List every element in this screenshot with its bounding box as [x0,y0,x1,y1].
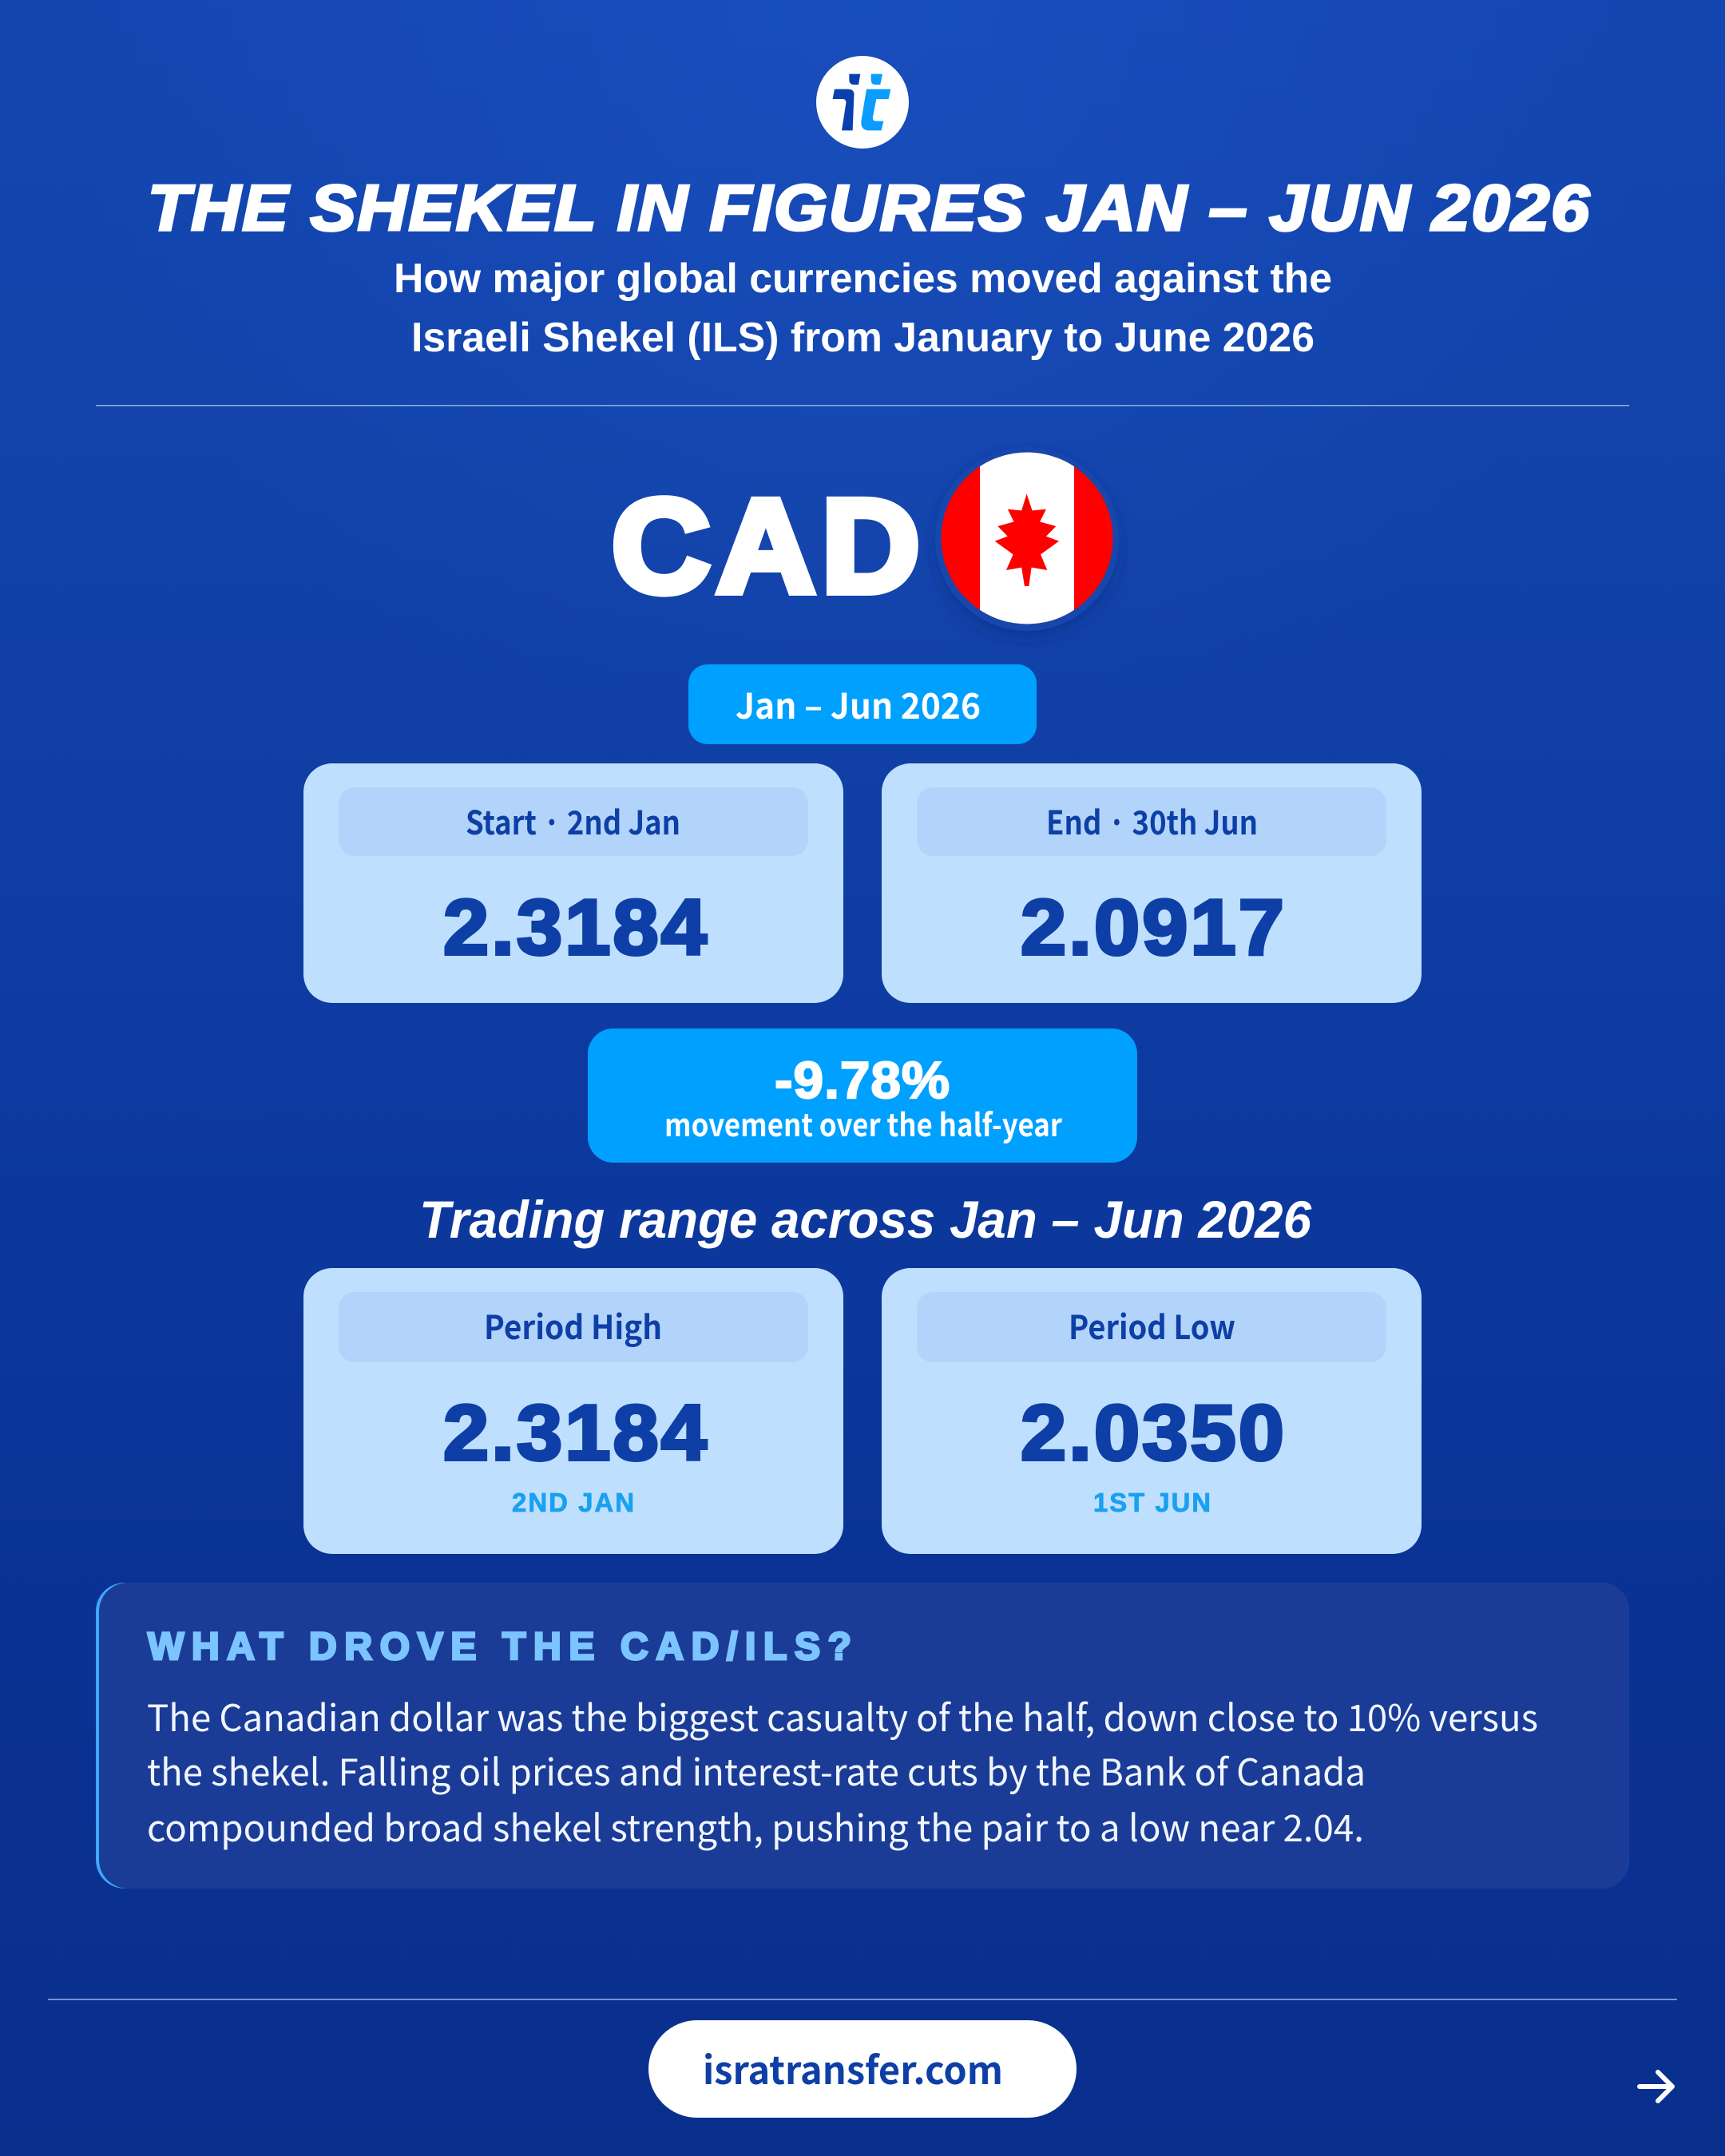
movement callout [588,1028,1137,1163]
panel body text [147,1690,1538,1853]
card: end rate: End · 30th Jun [1046,796,1258,844]
panel: what drove the CAD/ILS [96,1583,1629,1888]
period pill: Jan – Jun 2026 [736,678,981,729]
card: end rate [882,763,1422,1003]
logo [816,56,909,149]
panel body text: the shekel. Falling oil prices and interest-rate cuts by the Bank of Canada [147,1744,1366,1797]
trading range heading: Trading range across Jan – Jun 2026 [419,1190,1312,1249]
panel body text: compounded broad shekel strength, pushing the pair to a low near 2.04. [147,1800,1364,1853]
card: period low [882,1268,1422,1554]
icon: Canadian flag [934,447,1126,631]
panel heading: WHAT DROVE THE CAD/ILS? [148,1626,857,1668]
arrow [1640,2072,1672,2101]
period pill [688,664,1037,744]
card: end rate: 2.0917 [1021,883,1287,971]
subtitle: Israeli Shekel (ILS) from January to June 2026 [411,315,1315,361]
title: THE SHEKEL IN FIGURES JAN – JUN 2026 [148,172,1591,244]
card: start rate: Start · 2nd Jan [466,796,680,844]
movement callout: -9.78% [775,1051,950,1109]
currency heading: CAD: CAD [612,473,926,620]
subtitle [394,256,1332,361]
panel body text: The Canadian dollar was the biggest casualty of the half, down close to 10% versus [147,1690,1538,1742]
card: period high [303,1268,843,1554]
card: start rate [303,763,843,1003]
card: period high: 2ND JAN [512,1488,636,1517]
card: period high: Period High [484,1301,662,1349]
movement callout: movement over the half-year [664,1101,1063,1146]
card: start rate: 2.3184 [443,883,709,971]
card: period low: Period Low [1069,1301,1235,1349]
card: period low: 1ST JUN [1093,1488,1212,1517]
website pill: isratransfer.com [703,2039,1003,2095]
subtitle: How major global currencies moved against the [394,256,1332,302]
card: period high: 2.3184 [443,1389,709,1476]
card: period low: 2.0350 [1021,1389,1287,1476]
website pill [648,2020,1077,2118]
